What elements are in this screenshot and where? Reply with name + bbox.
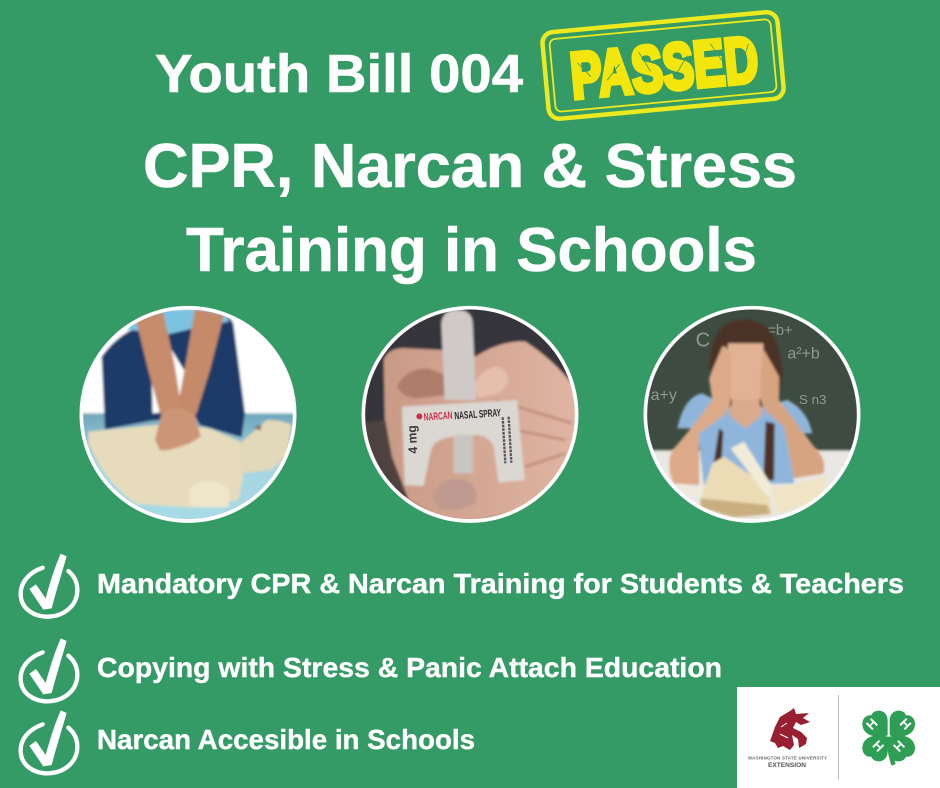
logo: 4-H clover bbox=[862, 711, 915, 766]
chalk writing: a²+b bbox=[787, 345, 820, 362]
heading line 1: CPR, Narcan & Stress bbox=[143, 132, 797, 201]
checklist item 1: Mandatory CPR & Narcan Training for Students & Teachers bbox=[97, 568, 904, 599]
title line: Youth Bill 004: Youth Bill 004 bbox=[155, 44, 523, 104]
logo: 4-H clover: H bbox=[869, 737, 887, 755]
icon: check mark 3 bbox=[21, 710, 77, 773]
logo: WSU Extension: EXTENSION bbox=[768, 762, 806, 769]
logo: WSU Extension: WASHINGTON STATE UNIVERSITY bbox=[748, 756, 827, 760]
chalk writing bbox=[651, 323, 826, 407]
heading line 2: Training in Schools bbox=[186, 216, 757, 285]
device label text: NARCAN bbox=[423, 410, 453, 424]
checklist item 3 bbox=[21, 710, 475, 773]
device label text: NASAL SPRAY bbox=[454, 407, 501, 422]
chalk writing: a+y bbox=[651, 387, 677, 404]
stamp: PASSED: PASSED bbox=[567, 22, 761, 112]
checklist item 1 bbox=[21, 554, 904, 617]
checklist item 2: Copying with Stress & Panic Attach Education bbox=[97, 652, 722, 683]
photo: CPR on a training manikin bbox=[80, 306, 296, 523]
device label text bbox=[405, 407, 511, 463]
stamp: PASSED bbox=[542, 11, 785, 120]
logo: 4-H clover: H bbox=[897, 715, 914, 733]
chalk writing: C bbox=[696, 330, 710, 352]
chalk writing: =b+ bbox=[767, 323, 793, 339]
photo: stressed student at chalkboard bbox=[644, 306, 860, 523]
photo: Narcan nasal spray held in a hand bbox=[362, 306, 578, 523]
device label text: 4 mg bbox=[405, 425, 420, 454]
logo: 4-H clover: H bbox=[863, 715, 881, 733]
logo: WSU Extension bbox=[748, 708, 827, 769]
chalk writing: S n3 bbox=[799, 392, 826, 407]
checklist item 2 bbox=[21, 638, 722, 701]
icon: check mark 2 bbox=[21, 638, 77, 701]
icon: check mark 1 bbox=[21, 554, 77, 617]
checklist item 3: Narcan Accesible in Schools bbox=[97, 724, 475, 755]
logo panel bbox=[737, 687, 940, 788]
logo: 4-H clover: H bbox=[890, 737, 908, 755]
